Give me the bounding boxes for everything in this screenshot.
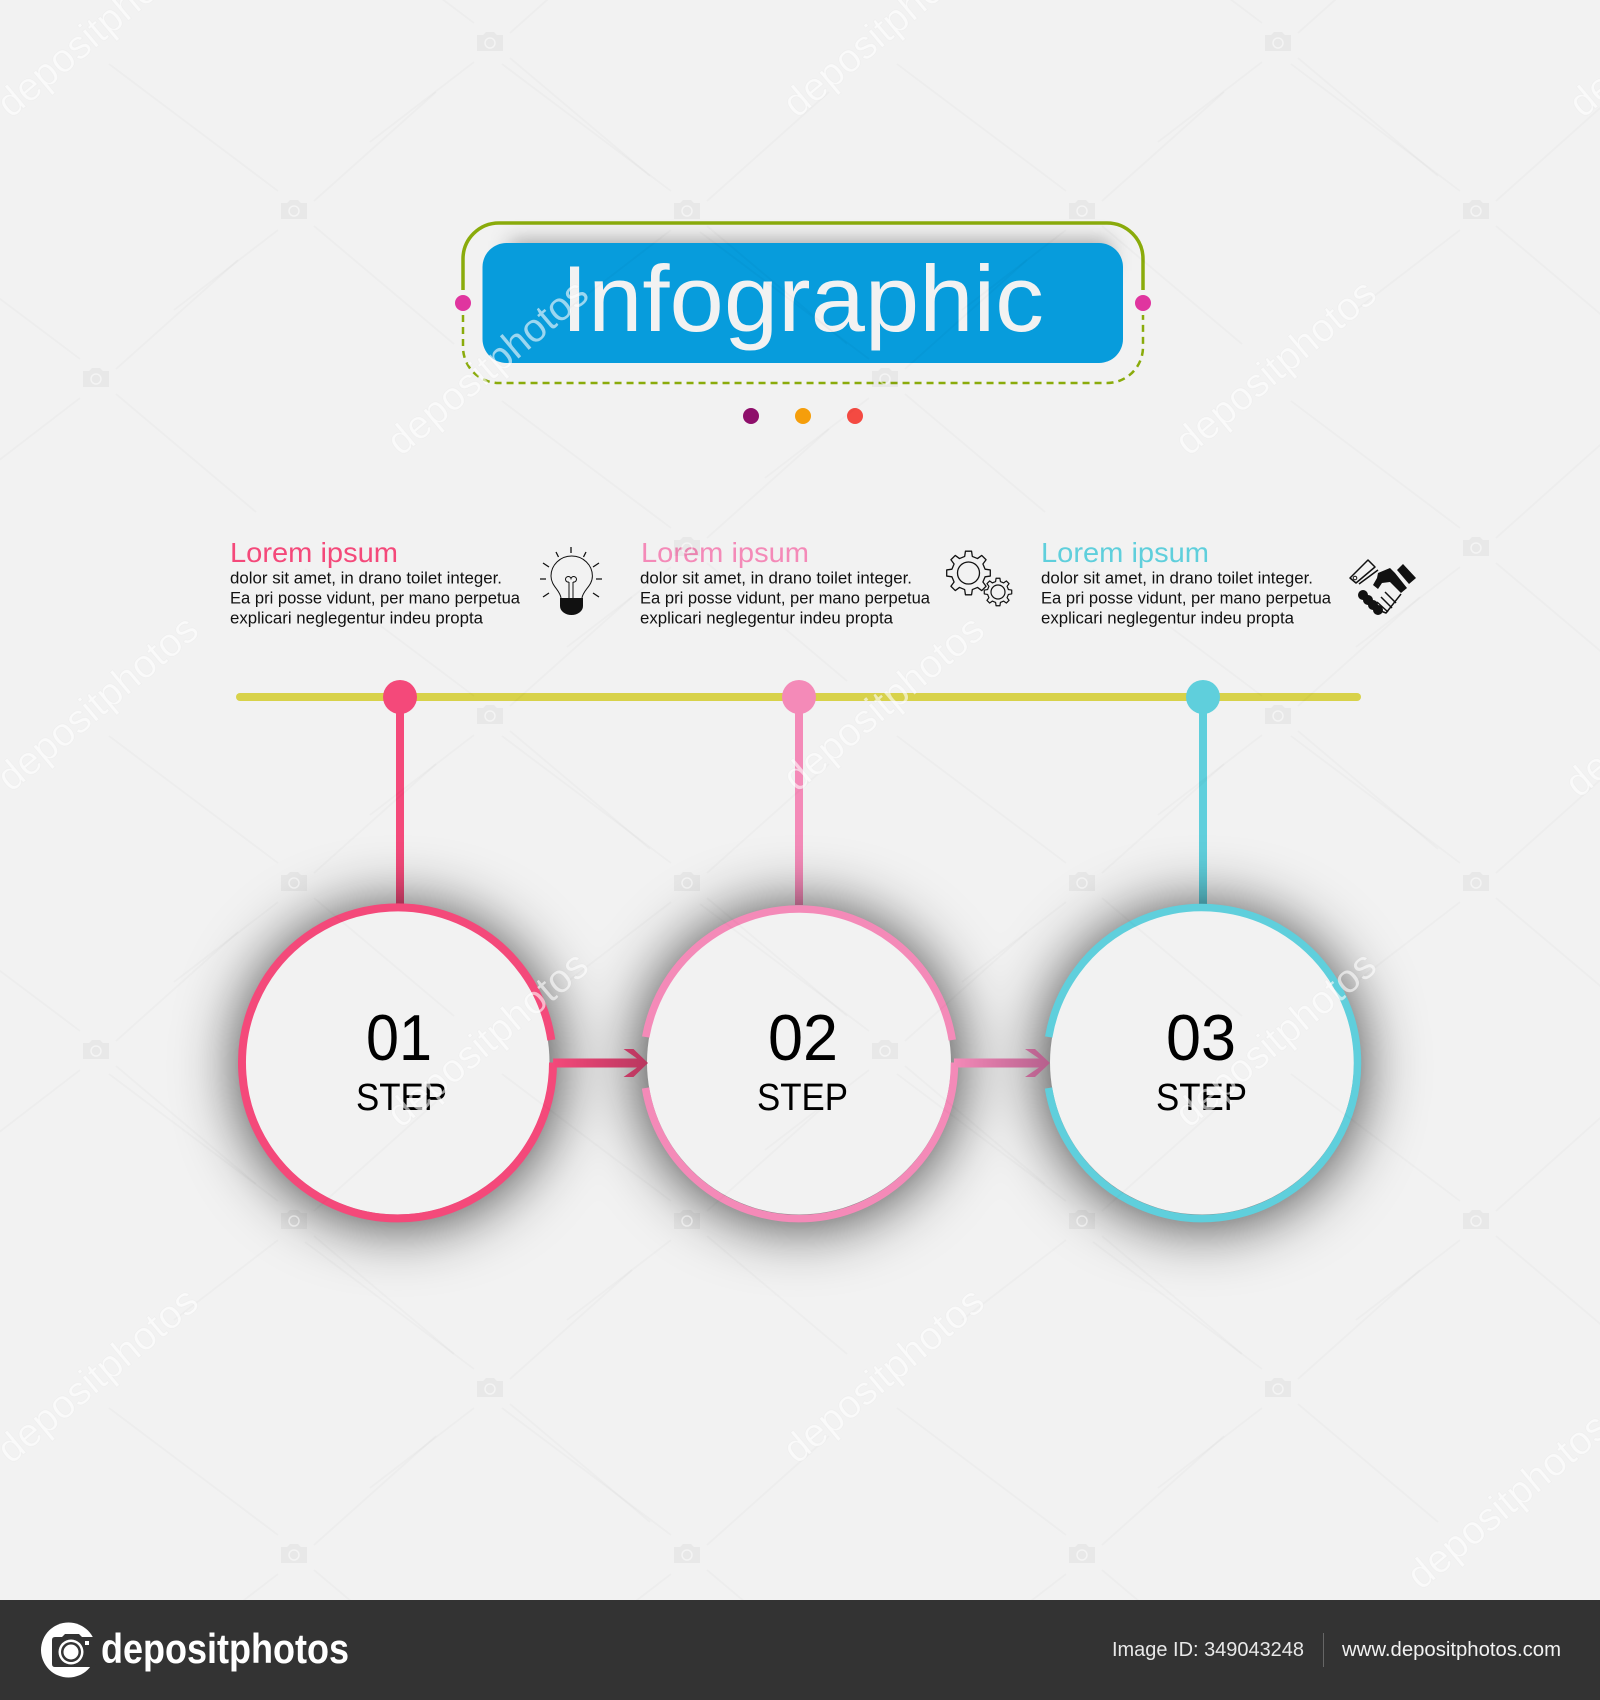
circle shadows	[240, 908, 1360, 1224]
footer bar	[0, 1600, 1600, 1700]
body 3: Ea pri posse vidunt, per mano perpetua	[1041, 588, 1332, 608]
icon: handshake	[1350, 560, 1416, 615]
body 1: Ea pri posse vidunt, per mano perpetua	[230, 588, 521, 608]
step 1 label: STEP	[356, 1077, 447, 1119]
watermarks: depositphotos	[1167, 943, 1385, 1136]
connector 2	[782, 680, 816, 905]
body 1: dolor sit amet, in drano toilet integer.	[230, 568, 502, 588]
arrow 1 to 2	[553, 1049, 648, 1077]
step 3 label: STEP	[1156, 1077, 1247, 1119]
body 3	[1041, 568, 1332, 628]
arrow 2 to 3	[954, 1049, 1050, 1077]
text block 2	[640, 537, 931, 628]
step 2 number: 02	[768, 1001, 838, 1074]
body 2	[640, 568, 931, 628]
body 3: dolor sit amet, in drano toilet integer.	[1041, 568, 1313, 588]
heading 1: Lorem ipsum	[230, 537, 398, 568]
website url: www.depositphotos.com	[1341, 1639, 1561, 1661]
body 2: explicari neglegentur indeu propta	[640, 608, 894, 628]
text block 3	[1041, 537, 1332, 628]
body 1	[230, 568, 521, 628]
timeline bar	[236, 693, 1361, 701]
footer logo wordmark: depositphotos	[101, 1625, 349, 1672]
footer logo icon	[41, 1622, 96, 1678]
body 3: explicari neglegentur indeu propta	[1041, 608, 1295, 628]
decorative title dots	[743, 408, 863, 424]
title text: Infographic	[561, 246, 1044, 351]
watermarks: depositphotos	[379, 943, 597, 1136]
step 1 circle	[242, 907, 553, 1218]
watermarks: depositphotos	[1167, 271, 1385, 464]
step 2 label: STEP	[757, 1077, 848, 1119]
text block 1	[230, 537, 521, 628]
heading 3: Lorem ipsum	[1041, 537, 1209, 568]
connector 3	[1186, 680, 1220, 905]
body 2: dolor sit amet, in drano toilet integer.	[640, 568, 912, 588]
title frame: solid top	[463, 223, 1143, 290]
step 3 number: 03	[1166, 1001, 1236, 1074]
watermarks: depositphotos	[775, 607, 993, 800]
title pill	[482, 243, 1123, 363]
step 3 circle	[1048, 908, 1357, 1219]
step 1 number: 01	[366, 1001, 432, 1074]
image id: Image ID: 349043248	[1112, 1639, 1304, 1661]
icon: gears	[947, 551, 1012, 606]
title frame: dashed bottom	[463, 315, 1143, 383]
frame node right	[1135, 295, 1151, 311]
frame node left	[455, 295, 471, 311]
title badge	[455, 223, 1151, 383]
body 2: Ea pri posse vidunt, per mano perpetua	[640, 588, 931, 608]
watermarks: depositphotos	[775, 1279, 993, 1472]
title pill shadow	[510, 241, 1110, 271]
heading 2: Lorem ipsum	[641, 537, 809, 568]
watermarks: depositphotos	[379, 271, 597, 464]
step 2 circle	[646, 909, 955, 1219]
icon: light bulb	[540, 547, 602, 615]
connector 1	[383, 680, 417, 905]
body 1: explicari neglegentur indeu propta	[230, 608, 484, 628]
